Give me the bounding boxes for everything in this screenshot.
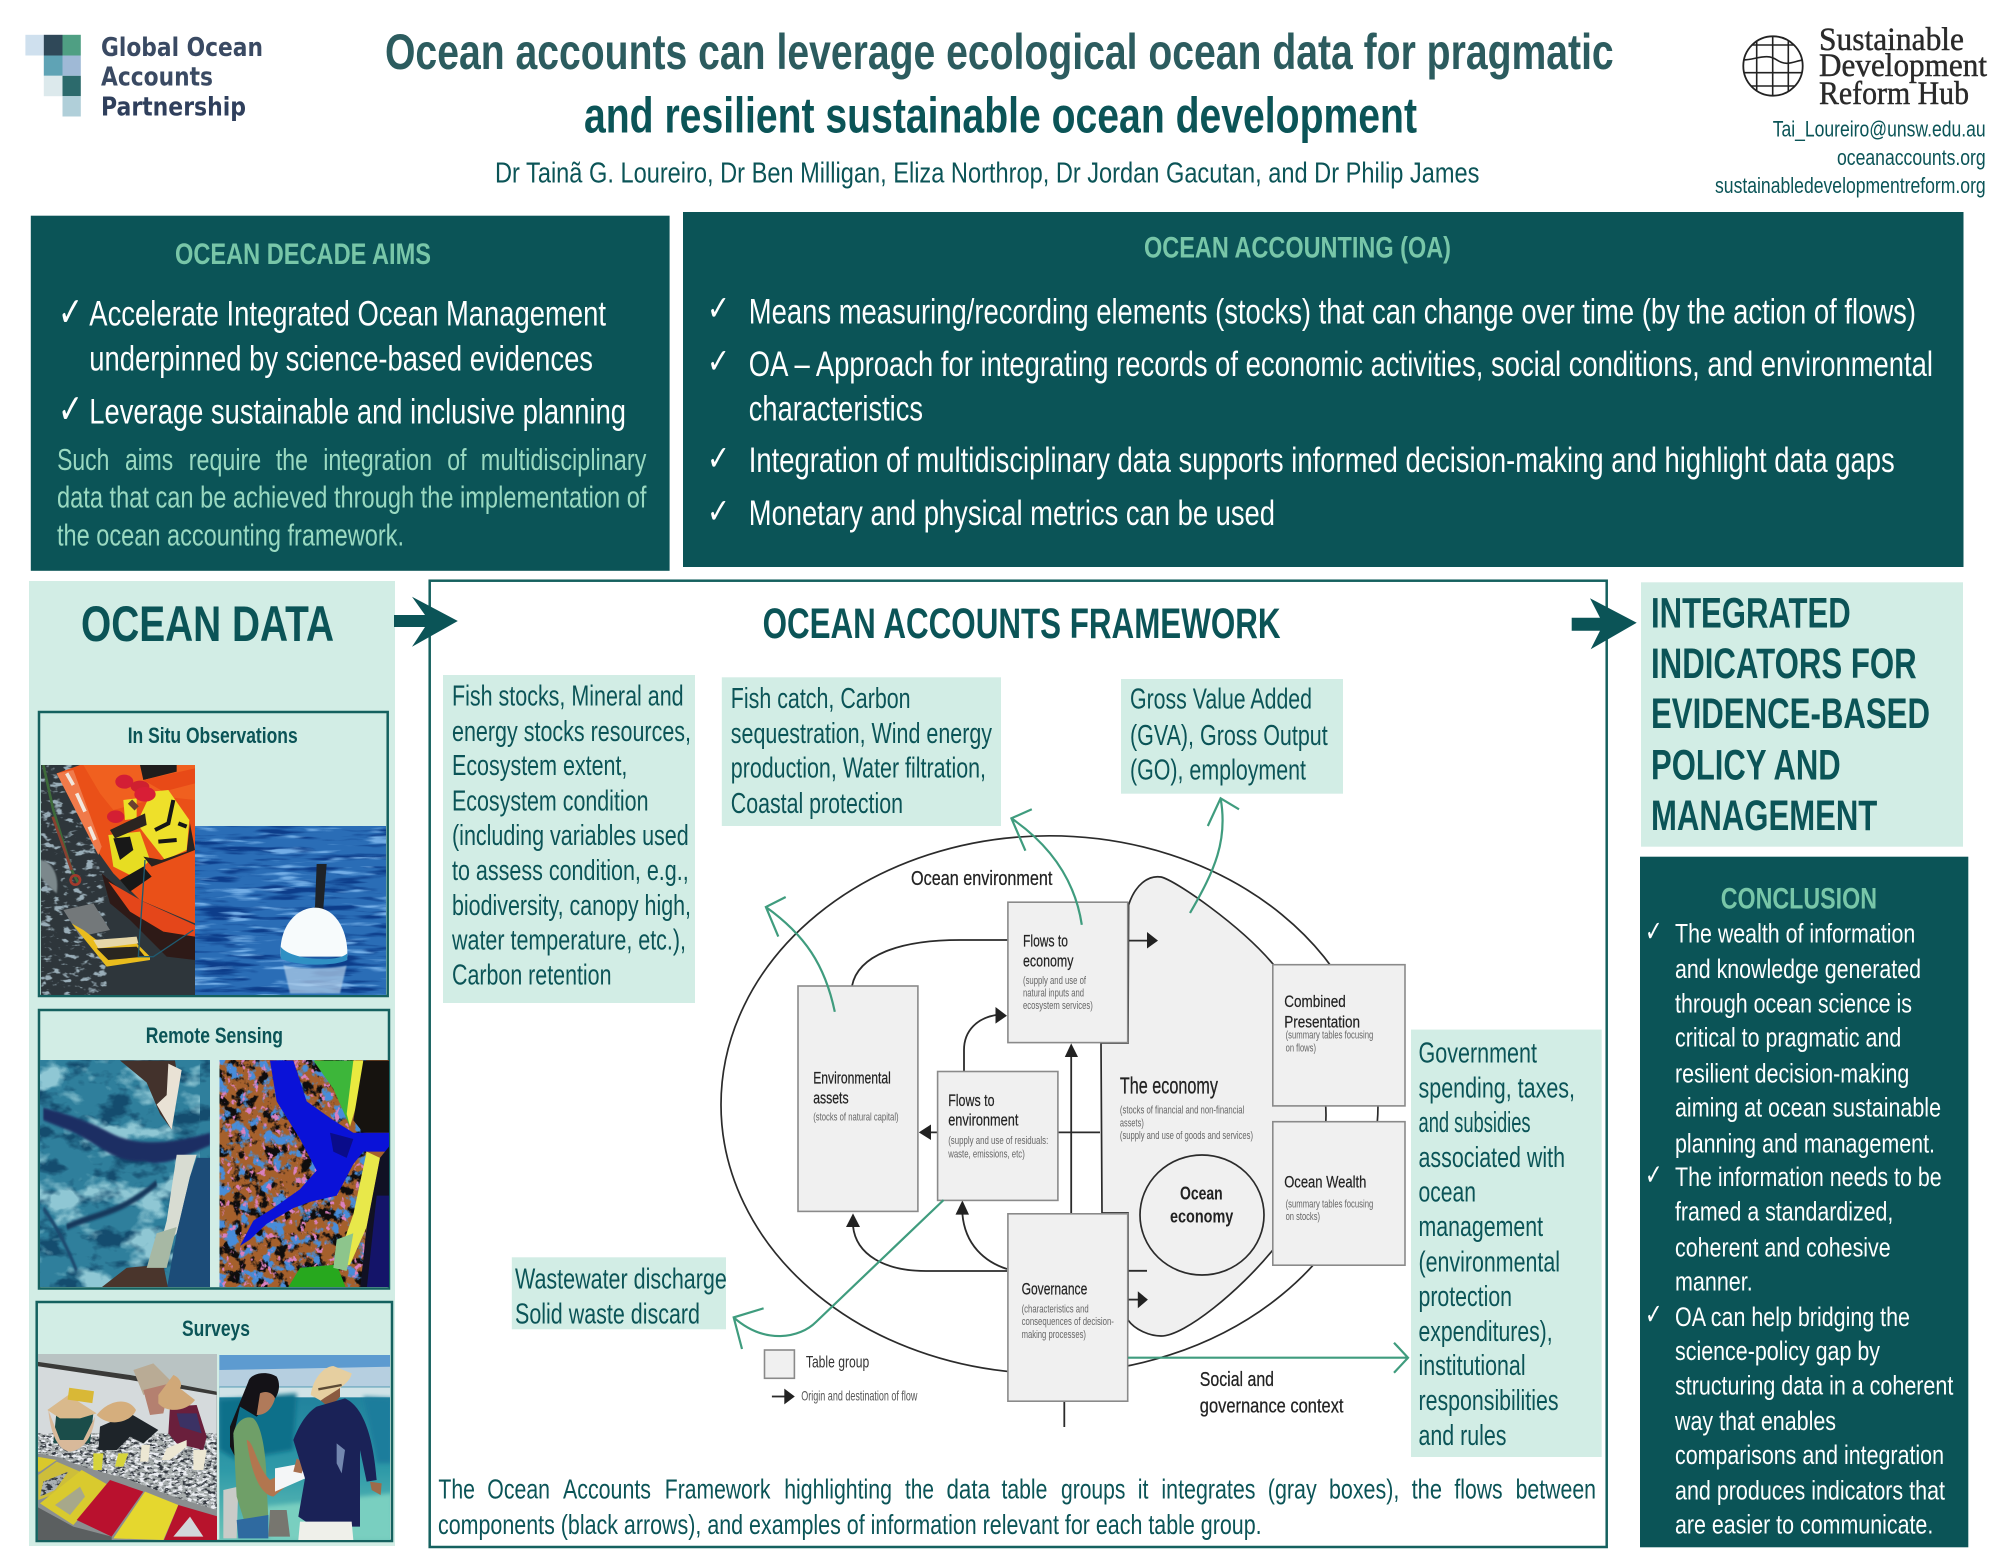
box: government examples: Government (1418, 1038, 1537, 1070)
box: government examples: (environmental (1418, 1246, 1560, 1278)
box: ocean wealth (1273, 1122, 1405, 1265)
conclusion checklist: coherent and cohesive (1675, 1233, 1891, 1263)
aims note: integration (323, 442, 432, 477)
box: government examples: associated with (1418, 1142, 1565, 1174)
panel: ocean decade aims (31, 216, 670, 571)
box: stock examples: energy stocks resources, (452, 716, 691, 748)
legend (764, 1350, 918, 1404)
accounting checklist: ✓ (707, 492, 730, 532)
sub-panel: surveys (37, 1302, 393, 1541)
box: economy examples: (GVA), Gross Output (1130, 720, 1328, 752)
caption: between (1516, 1473, 1596, 1504)
box: stock examples: Fish stocks, Mineral and (452, 680, 684, 712)
caption: table (1002, 1473, 1047, 1504)
accounting checklist: Monetary and physical metrics can be used (749, 494, 1275, 533)
caption: flows (1454, 1473, 1503, 1504)
aims note: the ocean accounting framework. (57, 518, 404, 553)
arrow: framework to indicators (1572, 598, 1637, 649)
green arrow: flows to economy examples (1011, 809, 1082, 925)
box: flows to environment: Flows to (948, 1091, 994, 1110)
caption: it (1138, 1473, 1149, 1504)
box: flow to economy examples: Fish catch, Carbon (731, 683, 911, 715)
box: flows to economy: ecosystem services) (1023, 1000, 1093, 1012)
box: combined presentation: Combined (1284, 992, 1346, 1011)
aims note: multidisciplinary (481, 442, 647, 477)
box: flow to economy examples (722, 677, 1001, 826)
circle: ocean economy: Ocean (1180, 1184, 1223, 1204)
label: the economy: The economy (1120, 1073, 1218, 1099)
box: combined presentation: Presentation (1284, 1013, 1360, 1032)
aims note: Such (57, 442, 109, 477)
box: government examples: management (1418, 1211, 1543, 1243)
legend: Table group (806, 1353, 869, 1372)
conclusion checklist: OA can help bridging the (1675, 1302, 1910, 1332)
conclusion checklist: are easier to communicate. (1675, 1509, 1933, 1539)
circle: ocean economy (1140, 1155, 1264, 1275)
label: the economy: (supply and use of goods and services) (1120, 1130, 1253, 1142)
diagram: ocean accounts framework (721, 836, 1405, 1427)
ocean environment ellipse (721, 836, 1378, 1374)
panel: ocean data (29, 581, 395, 1546)
caption: Accounts (563, 1473, 651, 1504)
panel: conclusion (1640, 857, 1968, 1547)
conclusion checklist (1645, 914, 1954, 1539)
sub-panel: in situ observations: In Situ Observations (128, 723, 298, 748)
label: the economy: (stocks of financial and non-financial (1120, 1104, 1244, 1116)
conclusion checklist: The wealth of information (1675, 919, 1915, 949)
box: governance: making processes) (1022, 1329, 1086, 1341)
box: economy examples: Gross Value Added (1130, 684, 1312, 716)
box: environmental assets: (stocks of natural capital) (813, 1112, 899, 1124)
box: flows to environment: environment (948, 1111, 1019, 1130)
photo: crew deploying instrument from orange boat (40, 763, 195, 995)
box: stock examples: Ecosystem condition (452, 785, 648, 817)
box: flows to economy: (supply and use of (1023, 975, 1087, 987)
box: government examples: and subsidies (1418, 1107, 1531, 1139)
circle: ocean economy: economy (1170, 1206, 1233, 1226)
accounting checklist: ✓ (707, 439, 730, 479)
logo: Global Ocean Accounts Partnership (25, 33, 263, 122)
conclusion checklist: through ocean science is (1675, 988, 1912, 1018)
aims note: of (447, 442, 467, 477)
box: flows to environment: (supply and use of residuals: (948, 1135, 1048, 1147)
sub-panel: remote sensing: Remote Sensing (146, 1023, 283, 1048)
heading: ocean decade aims: OCEAN DECADE AIMS (175, 238, 431, 271)
box: combined presentation: on flows) (1286, 1042, 1316, 1054)
aims note: data that can be achieved through the implementation of (57, 480, 647, 515)
caption: the (1412, 1473, 1442, 1504)
panel: integrated indicators: POLICY AND (1651, 742, 1841, 790)
conclusion checklist: aiming at ocean sustainable (1675, 1093, 1941, 1123)
conclusion checklist: ✓ (1645, 1297, 1662, 1331)
aims checklist: underpinned by science-based evidences (89, 340, 593, 379)
box: government examples: institutional (1418, 1350, 1526, 1382)
aims note: the (276, 442, 308, 477)
aims checklist: ✓ (58, 385, 83, 433)
caption: boxes), (1329, 1473, 1399, 1504)
aims checklist: Accelerate Integrated Ocean Management (89, 295, 606, 334)
box: stock examples (443, 675, 695, 1003)
image: classified habitat map (219, 1057, 391, 1290)
label: social and governance context: Social and (1200, 1369, 1274, 1391)
aims checklist (58, 288, 626, 433)
box: residual examples: Solid waste discard (515, 1298, 700, 1330)
box: governance: consequences of decision- (1022, 1316, 1114, 1328)
heading: ocean accounts framework: OCEAN ACCOUNTS FRAMEWORK (763, 600, 1280, 648)
panel: ocean accounting (683, 212, 1964, 567)
box: government examples: responsibilities (1418, 1385, 1558, 1417)
heading: ocean accounting: OCEAN ACCOUNTING (OA) (1144, 232, 1451, 265)
box: government examples: and rules (1418, 1420, 1506, 1452)
label: social and governance context: governance context (1200, 1395, 1344, 1417)
sub-panel: in situ observations (39, 712, 388, 996)
conclusion checklist: and knowledge generated (1675, 954, 1921, 984)
box: flows to economy: natural inputs and (1023, 988, 1084, 1000)
green arrow: economy examples (1190, 798, 1239, 913)
box: flows to economy (1008, 902, 1128, 1043)
label: the economy: assets) (1120, 1117, 1144, 1129)
caption: highlighting (784, 1473, 892, 1504)
box: flow to economy examples: sequestration, Wind energy (731, 718, 992, 750)
legend: Origin and destination of flow (801, 1387, 918, 1403)
box: stock examples: Carbon retention (452, 959, 612, 991)
caption: components (black arrows), and examples of information relevant for each table group. (438, 1509, 1262, 1540)
conclusion checklist: manner. (1675, 1267, 1753, 1297)
label: ocean environment: Ocean environment (911, 868, 1053, 890)
box: government examples: expenditures), (1418, 1316, 1553, 1348)
panel: ocean accounts framework (430, 581, 1607, 1547)
photo: white buoy on the sea (195, 826, 387, 996)
box: ocean wealth: on stocks) (1286, 1211, 1320, 1223)
black flow lines (846, 932, 1158, 1427)
box: flows to environment (938, 1072, 1058, 1200)
logo: Global Ocean Accounts Partnership: Global Ocean (101, 33, 263, 63)
conclusion checklist: framed a standardized, (1675, 1197, 1893, 1227)
title (385, 24, 1614, 143)
heading: ocean data: OCEAN DATA (81, 596, 334, 652)
box: government examples (1411, 1030, 1602, 1457)
box: governance (1008, 1214, 1128, 1401)
photo: aerial view of a tidal channel (40, 1057, 212, 1290)
caption: The (438, 1473, 475, 1504)
logo: Global Ocean Accounts Partnership: Partnership (101, 92, 246, 122)
box: governance: Governance (1022, 1280, 1087, 1298)
caption: Ocean (487, 1473, 550, 1504)
authors: Dr Tainã G. Loureiro, Dr Ben Milligan, Eliza Northrop, Dr Jordan Gacutan, and Dr Philip James (495, 157, 1479, 189)
caption: data (946, 1473, 990, 1504)
photo: two people recording notes at the reef (219, 1355, 393, 1540)
conclusion checklist: resilient decision-making (1675, 1059, 1909, 1089)
box: ocean wealth: (summary tables focusing (1286, 1198, 1373, 1210)
green arrow: government examples (1128, 1343, 1408, 1373)
box: economy examples (1121, 679, 1343, 794)
conclusion checklist: planning and management. (1675, 1128, 1935, 1158)
accounting checklist: ✓ (707, 342, 730, 382)
box: ocean wealth: Ocean Wealth (1284, 1173, 1366, 1192)
box: economy examples: (GO), employment (1130, 754, 1306, 786)
arrow: ocean data to framework (394, 597, 458, 647)
title: and resilient sustainable ocean development (584, 87, 1417, 143)
box: environmental assets: assets (813, 1088, 849, 1108)
logo: Sustainable Development Reform Hub (1742, 26, 1988, 104)
caption: (gray (1268, 1473, 1317, 1504)
conclusion checklist: way that enables (1674, 1406, 1836, 1436)
aims checklist: Leverage sustainable and inclusive planning (89, 393, 626, 432)
panel: integrated indicators (1641, 582, 1963, 847)
aims note: require (189, 442, 261, 477)
contact details (1715, 117, 1986, 198)
logo: Global Ocean Accounts Partnership: Accounts (101, 62, 213, 92)
box: residual examples: Wastewater discharge (515, 1264, 727, 1296)
box: stock examples: (including variables used (452, 820, 689, 852)
box: flow to economy examples: production, Water filtration, (731, 753, 986, 785)
logo: Sustainable Development Reform Hub: Development (1819, 48, 1987, 84)
conclusion checklist: critical to pragmatic and (1675, 1023, 1901, 1053)
panel: integrated indicators: MANAGEMENT (1651, 792, 1877, 840)
label: the economy (1120, 1073, 1253, 1142)
box: stock examples: Ecosystem extent, (452, 750, 627, 782)
caption: groups (1061, 1473, 1125, 1504)
sub-panel: surveys: Surveys (182, 1316, 250, 1341)
logo: Sustainable Development Reform Hub: Reform Hub (1819, 76, 1969, 112)
conclusion checklist: ✓ (1645, 1158, 1662, 1192)
box: residual examples (512, 1257, 727, 1330)
heading: conclusion: CONCLUSION (1721, 882, 1877, 915)
accounting checklist: characteristics (749, 390, 923, 429)
accounting checklist: ✓ (707, 289, 730, 329)
conclusion checklist: ✓ (1645, 914, 1662, 948)
aims note: aims (125, 442, 173, 477)
caption: integrates (1161, 1473, 1256, 1504)
aims note (57, 442, 647, 553)
green arrow: assets to stock examples (766, 897, 835, 1012)
conclusion checklist: science-policy gap by (1675, 1336, 1880, 1366)
caption: the (905, 1473, 934, 1504)
green arrow: residual examples (734, 1200, 944, 1349)
accounting checklist (707, 289, 1933, 533)
caption (438, 1473, 1596, 1540)
caption: Framework (665, 1473, 771, 1504)
box: combined presentation (1273, 965, 1405, 1106)
box: stock examples: to assess condition, e.g., (452, 855, 689, 887)
box: stock examples: water temperature, etc.), (451, 924, 686, 956)
box: government examples: spending, taxes, (1418, 1072, 1575, 1104)
sub-panel: remote sensing (39, 1010, 391, 1290)
box: flows to economy: economy (1023, 951, 1074, 970)
aims checklist: ✓ (58, 288, 83, 336)
box: stock examples: biodiversity, canopy high, (452, 890, 691, 922)
logo: Sustainable Development Reform Hub: Sustainable (1819, 22, 1964, 58)
panel: integrated indicators: INTEGRATED (1651, 589, 1851, 637)
box: government examples: ocean (1418, 1176, 1476, 1208)
economy blob (1101, 877, 1326, 1336)
box: environmental assets (798, 986, 918, 1211)
box: governance: (characteristics and (1022, 1303, 1089, 1315)
box: flow to economy examples: Coastal protection (731, 788, 903, 820)
label: social and governance context (1200, 1369, 1344, 1417)
box: environmental assets: Environmental (813, 1069, 891, 1088)
title: Ocean accounts can leverage ecological ocean data for pragmatic (385, 24, 1614, 80)
box: flows to economy: Flows to (1023, 932, 1068, 950)
box: government examples: protection (1418, 1281, 1512, 1313)
photo: fish market survey with vendors (37, 1353, 218, 1540)
box: combined presentation: (summary tables focusing (1286, 1030, 1373, 1042)
box: flows to environment: waste, emissions, etc) (947, 1148, 1025, 1160)
